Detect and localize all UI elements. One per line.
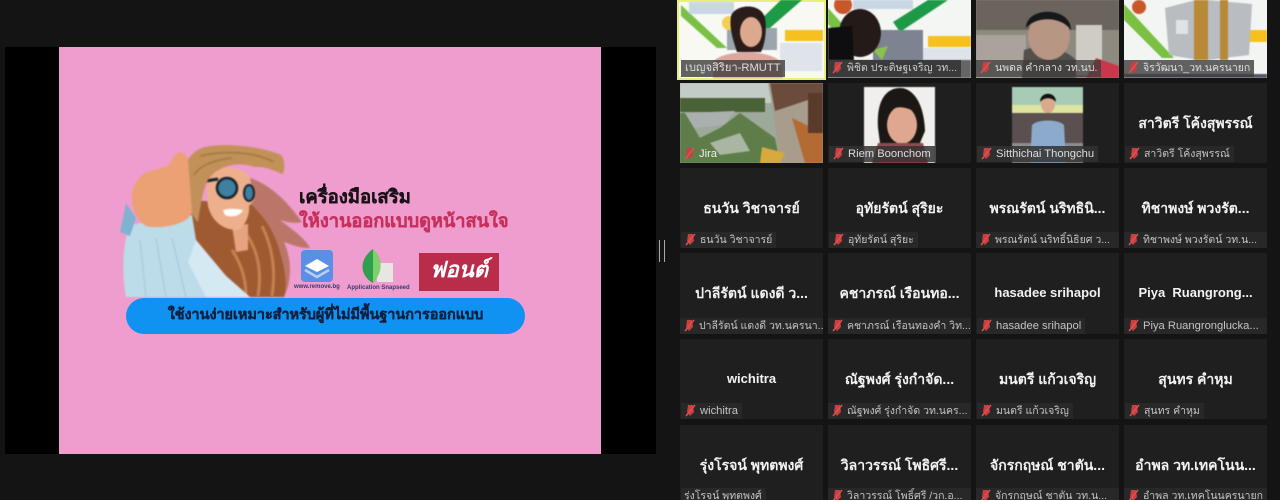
slide: pink background — [59, 47, 601, 454]
banner: easy to use: ใช้งานง่ายเหมาะสำหรับผู้ที่ไม่มีพื้นฐานการออกแบบ — [168, 307, 483, 323]
tile: Thichaphong — [1124, 168, 1267, 248]
name label — [1124, 488, 1267, 500]
name label: Jira — [699, 148, 717, 160]
tile: video 2 — [828, 0, 971, 78]
tile: Pornrat — [976, 168, 1119, 248]
name label: มนตรี แก้วเจริญ — [996, 405, 1069, 417]
tile: Sawitri — [1124, 83, 1267, 163]
name label: Riem Boonchom — [848, 148, 931, 160]
tile: wichitra — [680, 339, 823, 419]
name label: สุนทร คำหุม — [1144, 405, 1200, 417]
display name: ธนวัน วิชาจารย์ — [703, 200, 800, 216]
display name: อุทัยรัตน์ สุริยะ — [856, 200, 943, 216]
tile: Nattapong — [828, 339, 971, 419]
name label — [1125, 403, 1204, 419]
name label: wichitra — [700, 405, 738, 417]
name label — [977, 318, 1085, 334]
logo: font site — [419, 253, 499, 291]
name label — [1124, 232, 1267, 248]
name label: นพดล คำกลาง วท.นบ. — [995, 62, 1097, 74]
name label — [976, 232, 1119, 248]
illustration: woman with straw hat — [119, 144, 310, 298]
tile: Thanawan — [680, 168, 823, 248]
heading line 2: ให้งานออกแบบดูหน้าสนใจ — [299, 211, 509, 231]
display name: ปาลีรัตน์ แดงดี ว... — [695, 285, 808, 301]
name label — [1124, 60, 1254, 77]
tile: Piya — [1124, 253, 1267, 334]
display name: มนตรี แก้วเจริญ — [999, 371, 1096, 387]
display name: สาวิตรี โค้งสุพรรณ์ — [1138, 115, 1253, 131]
tile: video 4 — [1124, 0, 1267, 78]
name label — [828, 403, 971, 419]
name label — [977, 146, 1098, 162]
banner: easy to use — [126, 298, 525, 334]
display name: Piya Ruangrong... — [1138, 285, 1253, 300]
name label: ทิชาพงษ์ พวงรัตน์ วท.น... — [1143, 234, 1257, 246]
tile: video 3 — [976, 0, 1119, 78]
remove.bg label: www.remove.bg — [294, 284, 340, 290]
icon: Snapseed — [347, 249, 410, 291]
name label: hasadee srihapol — [996, 320, 1081, 332]
name label — [680, 318, 823, 334]
logo: font site: ฟอนต์ — [430, 257, 488, 282]
tile: Amphon — [1124, 425, 1267, 500]
name label — [681, 232, 776, 248]
tile: Kachaporn — [828, 253, 971, 334]
name label: ธนวัน วิชาจารย์ — [700, 234, 772, 246]
name label: พิชิต ประดิษฐเจริญ วท... — [847, 62, 957, 74]
name label — [828, 318, 971, 334]
name label: เบญจสิริยา-RMUTT — [685, 62, 781, 74]
tile: Sunthon — [1124, 339, 1267, 419]
name label: คชาภรณ์ เรือนทองคำ วิท... — [847, 320, 971, 332]
name label — [1125, 146, 1234, 162]
tile: presenter — [677, 0, 826, 80]
name label: Sitthichai Thongchu — [996, 148, 1094, 160]
name label — [684, 148, 717, 160]
name label — [828, 60, 961, 77]
name label: สาวิตรี โค้งสุพรรณ์ — [1144, 148, 1230, 160]
name label — [976, 60, 1101, 77]
display name: อำพล วท.เทคโนน... — [1135, 457, 1256, 473]
panel: shared slide — [5, 47, 656, 454]
name label — [1124, 318, 1267, 334]
display name: สุนทร คำหุม — [1158, 371, 1233, 387]
tile: Jakkrit — [976, 425, 1119, 500]
name label: พรณรัตน์ นริทธิ์นิธิยศ ว... — [995, 234, 1110, 246]
display name: พรณรัตน์ นริทธินิ... — [990, 200, 1105, 216]
name label — [829, 232, 918, 248]
display name: wichitra — [727, 371, 776, 386]
name label — [828, 488, 971, 500]
name label: Piya Ruangronglucka... — [1143, 320, 1259, 332]
tile: Sitthichai Thongchu — [976, 83, 1119, 163]
name label — [976, 488, 1119, 500]
name label — [681, 403, 742, 419]
slide heading — [299, 184, 509, 232]
display name: วิลาวรรณ์ โพธิศรี... — [841, 457, 958, 473]
name label: อุทัยรัตน์ สุริยะ — [848, 234, 914, 246]
display name: ณัฐพงศ์ รุ่งกำจัด... — [845, 371, 954, 387]
display name: รุ่งโรจน์ พุทตพงศ์ — [700, 457, 803, 473]
tile: Jira — [680, 83, 823, 163]
heading line 1: เครื่องมือเสริม — [299, 186, 411, 207]
tile: Uthairat — [828, 168, 971, 248]
name label — [829, 146, 935, 162]
name label: ปาลีรัตน์ แดงดี วท.นครนา... — [699, 320, 823, 332]
name label — [977, 403, 1073, 419]
tile: Monatree — [976, 339, 1119, 419]
tile: hasadee — [976, 253, 1119, 334]
tile: Wilawan — [828, 425, 971, 500]
divider handle — [659, 240, 665, 262]
name label: ณัฐพงศ์ รุ่งกำจัด วท.นคร... — [847, 405, 967, 417]
name label — [681, 60, 785, 77]
tile: Riem Boonchom — [828, 83, 971, 163]
tile: Palirat — [680, 253, 823, 334]
display name: จักรกฤษณ์ ชาตัน... — [990, 457, 1105, 473]
display name: คชาภรณ์ เรือนทอ... — [840, 285, 959, 301]
Snapseed label: Application Snapseed — [347, 285, 410, 291]
icon: remove.bg — [294, 250, 340, 290]
display name: ทิชาพงษ์ พวงรัต... — [1142, 200, 1249, 216]
tile: Rungroj — [680, 425, 823, 500]
name label: จิรวัฒนา_วท.นครนายก — [1143, 62, 1250, 74]
display name: hasadee srihapol — [994, 285, 1101, 300]
